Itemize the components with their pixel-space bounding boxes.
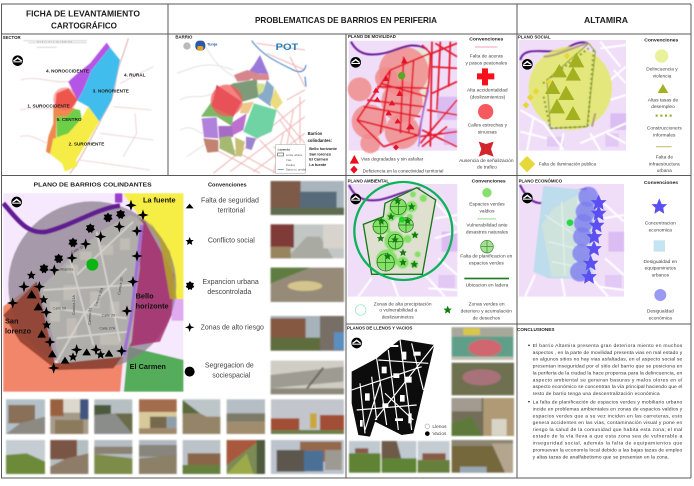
- legend: movilidad: sinuosas: [478, 129, 497, 135]
- legend row: deficiencia: Deficiencia en la conectividad territorial: [363, 169, 443, 174]
- sector labels: 4. NOROCCIDENTE: [46, 69, 89, 74]
- road markers: [373, 57, 415, 150]
- legend: ambiental: Falta de planificacion en: [460, 254, 513, 260]
- panel: plano de barrios colindantes: [3, 181, 344, 394]
- legend: movilidad: Alta accidentalidad: [467, 88, 508, 94]
- legend: movilidad: Falta de aceras: [470, 54, 504, 60]
- planning circles: [373, 199, 413, 271]
- legend: economico: Desigualdad: [647, 308, 674, 314]
- bullet paragraph 2: promuevan la economía local debido a las bajas tazas de empleo: [533, 447, 683, 453]
- icon: north arrow: [351, 338, 362, 348]
- legend: economico: Concentracion: [645, 221, 676, 227]
- barrios colindantes list: San lorenzo: [309, 152, 332, 156]
- legend: social: violencia: [653, 73, 672, 79]
- barrios colindantes list: colindantes:: [308, 138, 332, 143]
- legend: social: desempleo: [651, 104, 675, 110]
- street labels: Calle 31: [70, 245, 84, 254]
- bullet paragraph 1: la periferia de la ciudad la hace propensa para la delincuencia, en: [533, 370, 683, 376]
- header: ficha title: [26, 10, 140, 31]
- bullet paragraph 2: inseguridad social, además la falta de equipamientos que: [533, 441, 683, 447]
- legend: economico: Convenciones: [644, 180, 678, 186]
- legend row: zonas de alta precipitacion: deslizaminetos: [382, 314, 414, 320]
- legend: barrios colindantes: Convenciones: [208, 182, 247, 188]
- economic stars: [581, 194, 607, 284]
- header: ficha title: FICHA DE LEVANTAMIENTO: [26, 10, 140, 19]
- legend: barrios colindantes: sociespacial: [212, 373, 251, 380]
- bullet paragraph 2: riesgo la salud de la comunidad que habita esta zona; el mal: [533, 427, 682, 433]
- panel: sector map: 1. SUROCCIDENTE: [27, 103, 70, 108]
- bullet paragraph 2: y altas tazas de analfabetismo que se presentan en la zona.: [533, 454, 669, 460]
- legend: barrios colindantes: Zonas de alto riesgo: [201, 324, 264, 331]
- legend: movilidad: y pasos peatonales: [466, 61, 508, 67]
- bullet paragraph 1: aspecto ambiental se generan basuras y malos olores en el: [533, 377, 682, 383]
- bullet paragraph 2: estado de la vía lleva a que esta zona sea de vulnerable a: [533, 434, 683, 440]
- legend row: zonas verdes en deterioro: deterioro y acumulación: [461, 308, 512, 314]
- neighborhood labels: La fuente: [143, 195, 176, 204]
- legend row: deficiencia: [350, 166, 443, 174]
- legend: economico: economica: [649, 228, 672, 234]
- deterioration stars: [377, 197, 419, 268]
- logos: [183, 42, 191, 50]
- star markers: [27, 271, 105, 361]
- bullet paragraph 2: [528, 400, 683, 460]
- barrios colindantes list: La fuente: [309, 163, 326, 167]
- header: problematicas title: PROBLEMATICAS DE BARRIOS EN PERIFERIA: [255, 15, 437, 25]
- legend row: iluminacion: [519, 156, 597, 172]
- icon: north arrow: [12, 55, 23, 66]
- icon: north arrow: [522, 193, 533, 203]
- legend: ambiental: valdios: [479, 208, 495, 214]
- label: PLANO ECONÓMICO: [519, 179, 563, 184]
- label: PLANO DE MOVILIDAD: [348, 34, 396, 39]
- bullet paragraph 1: resto de barrio tenga una descentralización económica: [533, 391, 660, 397]
- legend box: Datos no. predial: [286, 168, 306, 172]
- legend: economico: [644, 180, 678, 321]
- panel: sector map: 4. RURAL: [124, 73, 146, 78]
- legend row: zonas de alta precipitacion: [355, 301, 432, 320]
- legend: social: urbana: [657, 168, 672, 174]
- street labels: Calle 27A: [99, 327, 116, 331]
- legend row: zonas de alta precipitacion: Zonas de alta precipitación: [374, 301, 432, 307]
- label: PLANOS DE LLENOS Y VACIOS: [347, 326, 413, 331]
- panel: sector map: 5. CENTRO: [57, 117, 82, 122]
- map: [348, 182, 457, 297]
- triangle markers: [27, 290, 113, 364]
- street labels: Calle 29: [102, 313, 115, 317]
- street labels: Carrera 20A: [94, 286, 105, 307]
- bullet paragraph 1: en algunos sitios no hay vias asfaltadas, en el aspecto social se: [533, 357, 683, 363]
- legend: ambiental: Ubicacion en ladera: [466, 282, 509, 288]
- icon: north arrow: [522, 59, 533, 70]
- legend: movilidad: (deslizamientos): [470, 95, 506, 101]
- panel: bottom photo strip: [6, 399, 344, 474]
- legend: social: Delincuencia y: [646, 66, 678, 72]
- legend: movilidad: [459, 37, 514, 171]
- legend row: vias degradadas: [350, 155, 424, 164]
- green center marker: [86, 259, 98, 271]
- neighborhood labels: [5, 195, 176, 371]
- legend: llenos: Llenos: [432, 424, 447, 430]
- legend row: zonas verdes en deterioro: Zonas verdes en: [469, 301, 505, 307]
- photos: right column: [271, 181, 344, 394]
- bullet paragraph 2: La falta de planificación de espacios verdes y mobiliario urbano: [533, 400, 683, 406]
- panel: barrio map: POT: [276, 42, 299, 52]
- street labels: Carrera 20: [117, 277, 124, 295]
- legend box: Predios: [286, 163, 296, 167]
- legend: social: Convenciones: [644, 37, 679, 43]
- panel: barrio map: [175, 34, 337, 173]
- legend: vacios: [425, 431, 447, 437]
- legend row: iluminacion: Falta de iluminación publica: [539, 162, 597, 167]
- label: PLANO SOCIAL: [518, 35, 551, 40]
- label: PLANO AMBIENTAL: [348, 179, 389, 184]
- icon: north arrow: [11, 197, 22, 207]
- legend: barrios colindantes: [185, 182, 264, 380]
- street labels: Altamira: [60, 267, 74, 271]
- lighting diamonds: [523, 53, 570, 109]
- legend: ambiental: Espacios verdes: [469, 202, 505, 208]
- barrios colindantes list: El Carmen: [309, 158, 329, 162]
- panel: barrio map: Tunja: [207, 41, 218, 46]
- street labels: Calle 29: [53, 307, 66, 311]
- map: [3, 193, 183, 392]
- legend row: zonas verdes en deterioro: [444, 301, 512, 321]
- panel: sector map: [3, 35, 153, 173]
- panel: plano economico: [519, 179, 678, 321]
- neighborhood labels: San: [5, 317, 19, 326]
- high precipitation ring: [354, 182, 452, 280]
- legend: social: infraestructura: [649, 161, 680, 167]
- street labels: Carrera 21A: [72, 295, 76, 315]
- neighborhood polygons: [201, 55, 283, 157]
- panel: sector map: 2. SURORIENTE: [69, 142, 104, 147]
- polygon outline: [363, 188, 436, 274]
- label: barrio: BARRIO: [175, 34, 193, 39]
- legend: social: Altas tasas de: [648, 97, 678, 103]
- header: ficha title: CARTOGRÁFICO: [51, 22, 117, 31]
- bullet paragraph 2: espacios verdes que a su vez inciden en las carreteras, esto: [533, 413, 683, 419]
- panel: plano ambiental: [348, 178, 513, 321]
- barrios colindantes list: Barrios: [308, 131, 323, 136]
- barrios colindantes list: [308, 131, 337, 167]
- legend: ambiental: Vulnerabilidad ante: [466, 223, 508, 229]
- legend row: vias degradadas: Vias degradadas y sin asfaltar: [361, 157, 424, 162]
- neighborhood labels: horizonte: [136, 301, 169, 310]
- map title strip: MUNICIPIO ALTAMIRA: [37, 41, 73, 44]
- legend: ambiental: espacios verdes: [469, 261, 504, 267]
- bullet paragraph 1: El barrio Altamira presenta gran deteriora miento en muchos: [533, 343, 683, 349]
- base street lines: [177, 41, 306, 173]
- legend: movilidad: de trafico: [477, 165, 497, 171]
- legend row: zonas de alta precipitacion: o vulnerabilidad a: [379, 308, 418, 314]
- bullet paragraph 1: presentan inseguridad por el sitio del barrio que se posiciona en: [533, 364, 683, 370]
- bullet paragraph 2: incide en problemas ambientales en zonas de espacios valdios y: [533, 406, 683, 412]
- legend: social: [644, 37, 682, 174]
- neighborhood labels: lorenzo: [5, 327, 32, 336]
- legend: movilidad: Calles estrechas y: [468, 123, 508, 129]
- bullet paragraph 1: aspecto económico se concentran la vía principal haciendo que el: [533, 384, 682, 390]
- legend: vacios: Vacios: [432, 431, 447, 437]
- legend: economico: Desigualdad en: [644, 259, 677, 265]
- panel: sector map: 3. NORORIENTE: [93, 88, 129, 93]
- legend: economico: equipaminetos: [645, 266, 677, 272]
- bullet paragraph 1: aspectos , en la parte de movilidad presenta vias en mal estado y: [533, 350, 683, 356]
- legend: economico: urbanos: [652, 273, 670, 279]
- legend box: [276, 145, 306, 173]
- legend: economico: económica: [649, 315, 672, 321]
- legend box: Leyenda: [278, 147, 290, 151]
- legend: ambiental: Convenciones: [472, 178, 506, 184]
- legend: social: informales: [653, 133, 676, 139]
- legend: social: Falta de: [656, 154, 673, 160]
- icon: north arrow: [350, 57, 361, 68]
- photos: [349, 327, 514, 473]
- barrios colindantes list: Bello horizonte: [309, 147, 337, 151]
- legend: ambiental: [460, 178, 513, 288]
- legend: barrios colindantes: Falta de seguridad: [201, 197, 259, 204]
- legend: movilidad: Ausencia de señalización: [459, 158, 514, 164]
- legend: barrios colindantes: territorial: [218, 207, 245, 214]
- legend: social: Construccioners: [647, 126, 682, 132]
- spike markers: high risk: [7, 200, 149, 374]
- street labels: [53, 245, 124, 331]
- legend row: zonas verdes en deterioro: de desechos: [473, 315, 501, 321]
- legend box: Límite urbano: [286, 153, 303, 157]
- legend: barrios colindantes: descontrolada: [207, 289, 251, 296]
- panel: plano de movilidad: [348, 34, 514, 174]
- heading: PLANO DE BARRIOS COLINDANTES: [34, 183, 152, 189]
- figure-ground map: [352, 339, 434, 437]
- header: altamira title: ALTAMIRA: [584, 15, 628, 25]
- unemployment triangles: [545, 53, 584, 120]
- street labels: Carrera 21: [88, 307, 92, 325]
- hexagon markers: urban expansion: [39, 209, 125, 273]
- bullet paragraph 2: genera accidentes en las vías, contaminación visual y pone en: [533, 420, 683, 426]
- neighborhood labels: Bello: [136, 291, 154, 300]
- map: [348, 41, 457, 153]
- legend: barrios colindantes: Conflicto social: [208, 237, 255, 244]
- map: [519, 40, 626, 151]
- neighborhood labels: El Carmen: [130, 362, 166, 371]
- icon: north arrow: [350, 194, 361, 204]
- legend: movilidad: Convenciones: [469, 37, 504, 43]
- legend: barrios colindantes: Segregacion de: [205, 363, 254, 370]
- label: sector: SECTOR: [3, 35, 21, 40]
- panel: plano social: [518, 35, 682, 174]
- legend: llenos: [425, 424, 447, 430]
- panel: conclusiones: [517, 327, 683, 460]
- panel: planos de llenos y vacios: [347, 326, 514, 473]
- base map lines: [20, 38, 153, 173]
- legend: ambiental: desastres naturales: [466, 230, 509, 236]
- heading: CONCLUSIONES: [517, 327, 554, 332]
- legend box: Vías: [286, 158, 292, 162]
- legend: barrios colindantes: Expancion urbana: [202, 279, 259, 286]
- sector polygons: [46, 43, 120, 172]
- bullet paragraph 1: [528, 343, 683, 397]
- map: [519, 184, 624, 297]
